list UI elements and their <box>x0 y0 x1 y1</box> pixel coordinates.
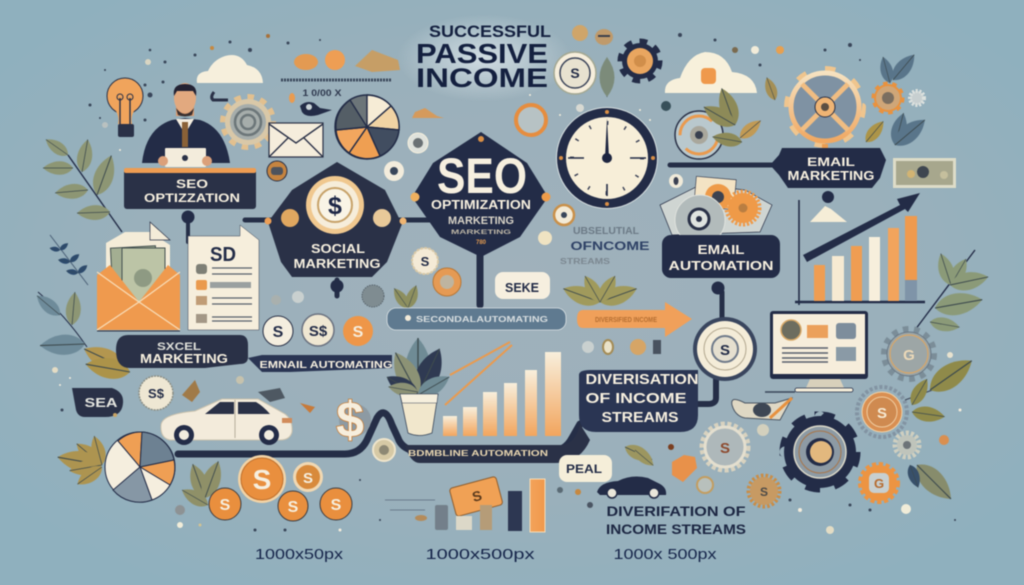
panel: SEO optization <box>124 168 256 209</box>
plant upper right <box>762 50 931 152</box>
small gears around: G <box>874 476 884 491</box>
coin row: S <box>273 324 284 341</box>
coin cream near seke <box>412 248 438 274</box>
icon: orange wheel gear <box>788 70 862 150</box>
tag: SEKE <box>495 272 550 299</box>
labels mid-left small icons <box>271 284 421 311</box>
pin <box>182 210 194 224</box>
coin row <box>263 314 373 346</box>
coins bottom: S <box>253 464 271 495</box>
panel: email marketing <box>770 148 886 188</box>
coin SS: S$ <box>148 386 165 401</box>
plant lower left <box>33 291 132 382</box>
panel: social marketing: $ <box>328 192 342 220</box>
coins bottom: S <box>288 499 299 516</box>
icon: cloud left <box>197 55 263 83</box>
panel: diversification of income streams <box>579 370 698 432</box>
icon: spiral sprocket <box>224 98 272 146</box>
plant upper left <box>42 135 122 232</box>
tilted banknote: S <box>470 487 484 505</box>
panel: email marketing: MARKETING <box>788 169 874 183</box>
coins bottom: S <box>303 470 313 487</box>
tag: PEAL: PEAL <box>566 462 602 476</box>
plant lower right <box>905 351 978 507</box>
icon: coin S top <box>554 52 596 94</box>
icon: target ring <box>675 111 723 159</box>
small row under arrow <box>582 339 661 355</box>
pin social <box>330 280 344 292</box>
text: diversification of income streams: INCOME STREAMS <box>606 521 746 537</box>
plant near pie <box>56 434 109 490</box>
title: PASSIVE <box>416 38 548 69</box>
tag: SEA: SEA <box>84 395 118 410</box>
coin cream near seke: S <box>421 254 430 269</box>
title <box>396 14 572 102</box>
icon: coin S top: S <box>570 65 580 81</box>
panel: SEO optimization marketing: 780 <box>476 240 487 246</box>
plant near coins <box>179 458 227 511</box>
icon: plant mid <box>700 85 765 149</box>
coin row: S$ <box>309 323 328 340</box>
title: INCOME <box>416 63 548 93</box>
tilted banknote <box>449 476 503 517</box>
pill: second automating: SECONDALAUTOMATING <box>416 314 548 324</box>
monitor <box>765 311 868 392</box>
icon: dark gear top <box>622 43 658 79</box>
big dark gear <box>784 416 856 488</box>
panel: diversification of income streams: STREAMS <box>602 409 678 426</box>
bar chart right <box>795 191 925 305</box>
small gears around <box>668 424 949 514</box>
coin orange with gear: S <box>877 405 887 422</box>
size label 3: 1000x 500px <box>614 547 717 563</box>
arrow: orange: DIVERSIFIED INCOME <box>595 317 657 324</box>
chart: pie bottom <box>105 432 175 502</box>
size label 2: 1000x500px <box>426 547 536 563</box>
tag: SEA <box>72 388 123 417</box>
coin row: S <box>353 324 364 341</box>
icon: coin ring: S <box>720 342 730 359</box>
panel: social marketing <box>264 162 406 277</box>
panel: SEO optimization marketing: OPTIMIZATION <box>431 197 531 212</box>
small gears around: S <box>720 440 730 457</box>
panel: diversification of income streams: OF INCOME <box>586 390 686 407</box>
icon: balls and rings <box>516 25 683 245</box>
faded text: substantial income streams: STREAMS <box>560 257 611 266</box>
icon: businessman <box>142 83 230 167</box>
gray gear right: G <box>903 347 915 364</box>
coin SS <box>139 376 173 410</box>
small ring <box>373 439 395 461</box>
plant: olive center <box>560 273 640 310</box>
tag: PEAL <box>559 455 612 482</box>
title: SUCCESSFUL <box>429 22 551 41</box>
1000 size note: 1 0/00 X <box>302 88 342 98</box>
panel: SOCIAL marketing lower <box>116 335 248 368</box>
coins bottom <box>209 455 352 521</box>
coin orange near seke <box>433 268 461 296</box>
panel: email automation: EMAIL <box>698 242 745 257</box>
coin orange with gear <box>857 387 907 437</box>
text: diversification of income streams <box>606 503 746 537</box>
icon: papers with orange gear <box>660 176 772 245</box>
icon: dollar bill <box>893 158 956 188</box>
icon: small gears upper right <box>874 84 924 112</box>
pin automation <box>712 282 724 294</box>
panel: SEO optization: OPTIZZATION <box>144 191 240 205</box>
small loop near monitor <box>732 398 792 436</box>
icon: light bulb <box>107 78 143 137</box>
icon: cloud right <box>665 52 757 93</box>
leaves near peal <box>622 441 657 470</box>
panel: social marketing: SOCIAL <box>311 241 365 256</box>
text: diversification of income streams: DIVERIFATION OF <box>606 503 746 519</box>
panel: email automation <box>662 235 780 278</box>
small figures <box>182 376 315 413</box>
icon: envelope <box>269 123 323 157</box>
small gears around: S <box>760 485 768 499</box>
panel: SEO optimization marketing: MARKETING <box>448 215 514 227</box>
panel: diversification of income streams: DIVERISATION <box>586 371 698 388</box>
icon: coin ring <box>693 317 757 381</box>
icon: small navy car <box>597 477 666 498</box>
plant with pot <box>383 338 453 436</box>
gray gear right <box>884 329 934 379</box>
plant right <box>915 250 990 334</box>
top small marks <box>212 50 444 181</box>
arrow: orange <box>577 302 692 337</box>
banner dark automation <box>405 424 590 463</box>
panel: email automation: AUTOMATION <box>668 258 774 273</box>
panel: SOCIAL marketing lower: SXCEL <box>157 341 201 353</box>
envelope with cash <box>97 222 180 331</box>
panel: email automating: EMNAIL AUTOMATING <box>260 359 392 371</box>
bar chart center <box>443 342 561 436</box>
panel: email marketing: EMAIL <box>807 155 855 169</box>
pill: second automating <box>387 308 566 330</box>
document SD <box>188 225 259 330</box>
icon: clock <box>556 107 658 209</box>
document SD: SD <box>210 244 236 266</box>
small bars bottom <box>385 479 545 532</box>
panel: social marketing: MARKETING <box>294 256 380 271</box>
size label 1: 1000x50px <box>255 547 344 563</box>
car <box>161 399 292 445</box>
panel: SEO optization: SEO <box>176 177 208 191</box>
banner dark automation: BDMBLINE AUTOMATION <box>408 448 548 458</box>
faded text: substantial income streams: OFNCOME <box>570 239 650 253</box>
panel: SEO optimization marketing <box>410 132 550 257</box>
faded text: substantial income streams <box>560 226 650 266</box>
icon: sprout above clock <box>600 57 614 97</box>
panel: SOCIAL marketing lower: MARKETING <box>140 352 228 366</box>
tag: SEKE: SEKE <box>505 280 539 295</box>
chart: pie top <box>335 95 399 159</box>
connector lines <box>178 165 780 454</box>
panel: email automating <box>248 355 392 372</box>
plant blue small <box>49 235 89 285</box>
faded text: substantial income streams: UBSELUTIAL <box>573 226 639 237</box>
icon: big dollar: $ <box>336 392 364 448</box>
panel: SEO optimization marketing: MARKETING <box>451 230 512 236</box>
panel: SEO optimization marketing: SEO <box>437 148 527 204</box>
coins bottom: S <box>331 497 342 514</box>
coins bottom: S <box>220 497 231 514</box>
